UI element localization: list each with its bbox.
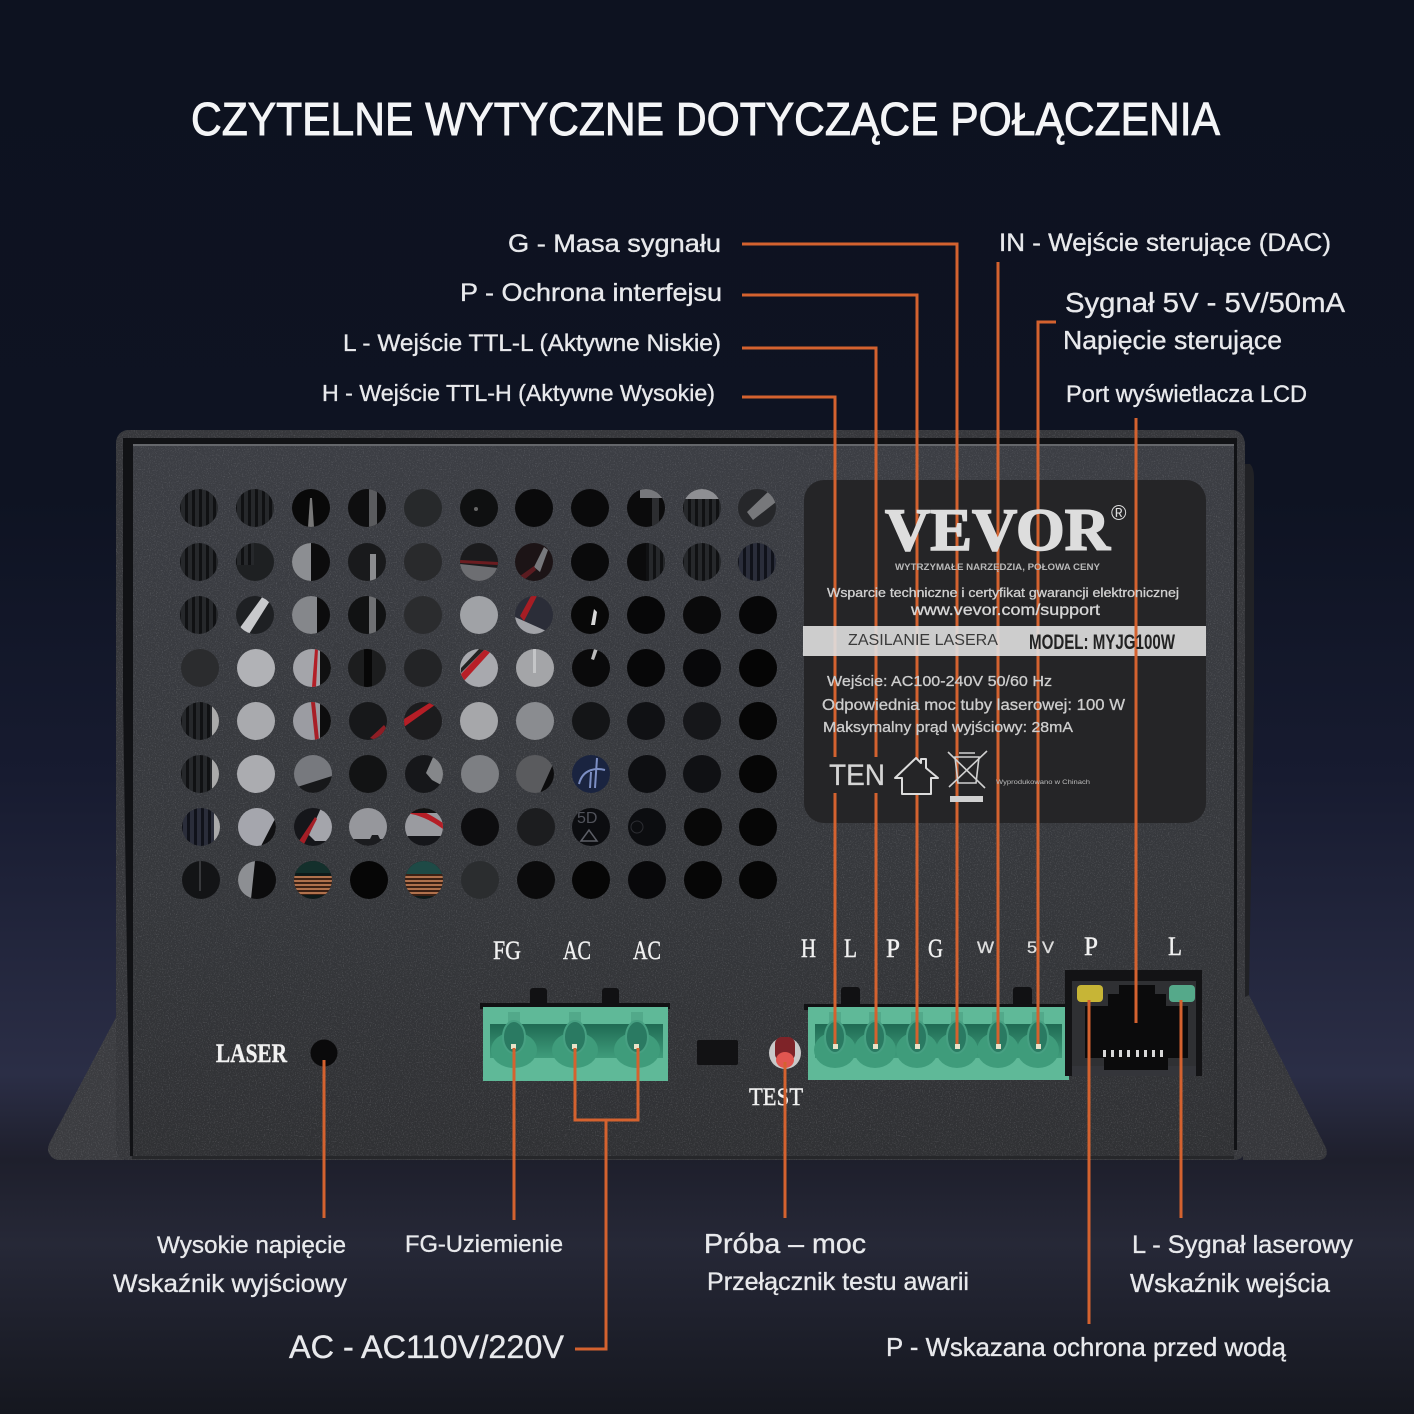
callout: 5V signal: [1063, 287, 1345, 355]
title: CZYTELNE WYTYCZNE DOTYCZĄCE POŁĄCZENIA: [191, 93, 1220, 145]
icon: house: [895, 758, 938, 794]
right side flange: [1240, 464, 1254, 1160]
input spec: Wejście: AC100-240V 50/60 Hz: [827, 673, 1052, 690]
row 7: [182, 808, 777, 846]
callout: 5V signal: Sygnał 5V - 5V/50mA: [1065, 287, 1345, 318]
callout: water protection: P - Wskazana ochrona przed wodą: [886, 1332, 1287, 1362]
H line: [742, 397, 835, 1048]
control terminal labels: P: [1084, 932, 1098, 961]
5V line: [1038, 322, 1056, 1048]
row 7: 5D: [577, 810, 597, 827]
callout: LCD port: Port wyświetlacza LCD: [1066, 381, 1307, 408]
callout: high voltage indicator: Wskaźnik wyjściowy: [113, 1270, 348, 1298]
callout: test: Przełącznik testu awarii: [707, 1268, 969, 1296]
AC green terminal block: [480, 988, 670, 1081]
callout: laser signal: Wskaźnik wejścia: [1130, 1268, 1331, 1298]
callout: IN: IN - Wejście sterujące (DAC): [999, 229, 1331, 257]
tube power spec: Odpowiednia moc tuby laserowej: 100 W: [822, 697, 1126, 714]
contacts: [1103, 1050, 1163, 1057]
registered mark: ®: [1111, 502, 1127, 525]
leader lines: [324, 244, 1181, 1349]
callout: L: L - Wejście TTL-L (Aktywne Niskie): [343, 330, 721, 357]
test toggle switch: [769, 1037, 801, 1069]
callout: P: P - Ochrona interfejsu: [460, 279, 722, 307]
FG line: [512, 1048, 516, 1220]
AC terminal labels: AC: [633, 936, 661, 965]
made in china: Wyprodukowano w Chinach: [996, 779, 1090, 786]
callout: laser signal: L - Sygnał laserowy: [1132, 1231, 1353, 1259]
control green terminal block: [804, 987, 1069, 1080]
panel highlight edge: [133, 444, 1234, 446]
control terminal labels: L: [1168, 932, 1182, 961]
AC terminal labels: AC: [563, 936, 591, 965]
callout: H: H - Wejście TTL-H (Aktywne Wysokie): [322, 380, 715, 406]
current spec: Maksymalny prąd wyjściowy: 28mA: [823, 719, 1073, 736]
test line: [784, 1062, 786, 1218]
row 1: [180, 489, 776, 527]
product name: ZASILANIE LASERA: [848, 632, 998, 649]
green LED: [1169, 985, 1195, 1002]
callout: high voltage indicator: Wysokie napięcie: [157, 1232, 346, 1259]
callout: 5V signal: Napięcie sterujące: [1063, 325, 1282, 355]
row 2: [180, 543, 776, 581]
AC terminal labels: [493, 936, 661, 965]
pins on control terminal: [833, 1044, 1041, 1049]
L line: [742, 348, 876, 1048]
row 8: [182, 861, 777, 899]
callout: AC: AC - AC110V/220V: [289, 1329, 565, 1365]
AC bracket line: [575, 1048, 638, 1349]
P line: [742, 295, 917, 1048]
VEVOR logo: VEVOR: [885, 497, 1111, 563]
model number: MODEL: MYJG100W: [1029, 631, 1175, 654]
power supply unit: [46, 428, 1330, 1162]
right mounting foot: [1243, 995, 1327, 1160]
callout: high voltage indicator: [113, 1232, 348, 1298]
AC terminal labels: FG: [493, 936, 521, 965]
control terminal labels: W: [977, 938, 994, 957]
casing shadow lines: [123, 438, 1237, 1156]
TEN mark: TEN: [829, 759, 885, 792]
laser signal line: [1180, 1000, 1182, 1218]
row 4: [181, 649, 777, 687]
LCD line over band: [1134, 626, 1138, 656]
icon: crossed bin: [948, 751, 987, 802]
LCD port line: [1134, 418, 1138, 1023]
callout: test: Próba – moc: [704, 1228, 866, 1259]
control terminal labels: 5 V: [1027, 938, 1055, 957]
control terminal labels: G: [928, 934, 943, 963]
control terminal labels: L: [844, 934, 857, 963]
row 3: [180, 596, 777, 634]
IN line: [996, 262, 1000, 1048]
row 6: [181, 755, 777, 793]
speckled metal texture: [46, 428, 1330, 1162]
support text: Wsparcie techniczne i certyfikat gwarancji elektronicznej: [827, 585, 1179, 600]
white model band: [803, 626, 1206, 656]
TEST label: TEST: [749, 1084, 803, 1111]
tagline: WYTRZYMAŁE NARZĘDZIA, POŁOWA CENY: [895, 562, 1101, 573]
yellow LED: [1077, 985, 1103, 1002]
ventilation holes: [180, 489, 777, 899]
control terminal labels: H: [801, 934, 816, 963]
row 5: [181, 702, 777, 740]
control terminal labels: P: [886, 934, 900, 963]
product label contents: [803, 497, 1206, 802]
callout: G: G - Masa sygnału: [508, 230, 721, 258]
front panel: [133, 444, 1234, 1158]
G line: [742, 244, 957, 1048]
water protection line: [1088, 1000, 1090, 1324]
callout: FG: FG-Uziemienie: [405, 1231, 563, 1258]
control terminal labels: [801, 932, 1182, 963]
left mounting foot: [48, 1008, 124, 1160]
DIP switch: [697, 1040, 738, 1065]
support url: www.vevor.com/support: [910, 602, 1101, 619]
callout: laser signal: [1130, 1231, 1353, 1298]
RJ45 LCD port: [1065, 970, 1202, 1076]
LASER label: LASER: [216, 1039, 287, 1068]
callout: test: [704, 1228, 969, 1296]
laser output socket: [310, 1040, 338, 1066]
laser output line: [322, 1060, 326, 1218]
product label background: [804, 480, 1206, 823]
outer casing: [116, 430, 1245, 1160]
